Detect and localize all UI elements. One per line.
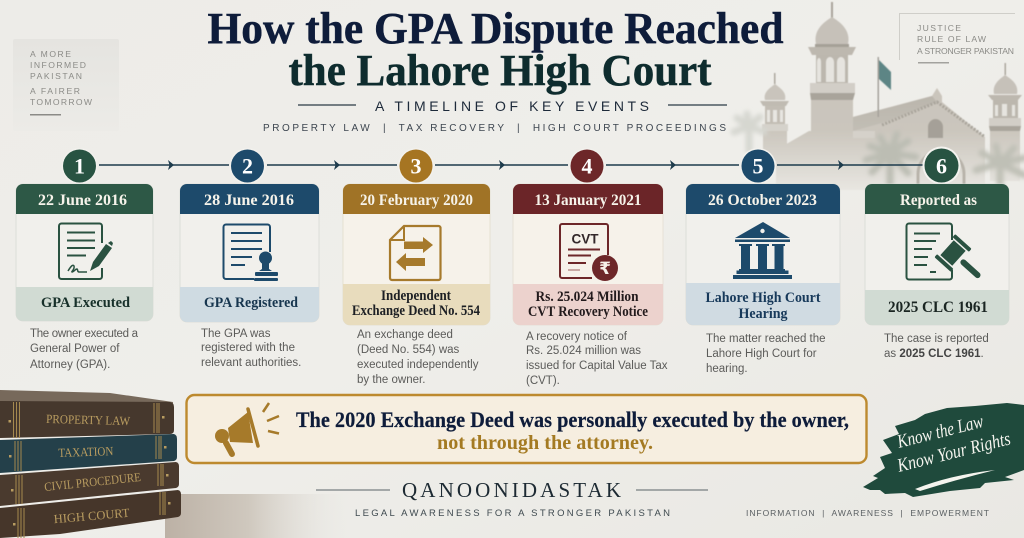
timeline connector arrows <box>99 160 923 170</box>
step 3 description: An exchange deed <box>357 329 453 341</box>
step 5 card: Lahore High Court <box>706 290 820 306</box>
illustration: stack of law books <box>0 390 181 538</box>
step 6 description: The case is reported <box>884 333 989 345</box>
step 6 number: 6 <box>936 154 947 178</box>
step 6 <box>865 146 1009 360</box>
brand footer: LEGAL AWARENESS FOR A STRONGER PAKISTAN <box>355 508 670 519</box>
step 1 description: General Power of <box>30 343 120 355</box>
icon: CVT notice <box>560 224 618 281</box>
step 1 number: 1 <box>74 154 85 178</box>
book: property law: PROPERTY LAW <box>46 412 130 428</box>
callout: key finding: not through the attorney. <box>437 432 653 454</box>
step 4 description <box>526 331 668 387</box>
step 2 description: registered with the <box>201 342 295 354</box>
step 4 number <box>569 148 605 184</box>
icon: CVT notice: ₹ <box>599 259 611 279</box>
callout: key finding: The 2020 Exchange Deed was personally executed by the owner, <box>296 407 849 432</box>
note: top right <box>900 14 1015 64</box>
step 5 card: 26 October 2023 <box>708 192 817 209</box>
step 3 description: (Deed No. 554) was <box>357 344 460 356</box>
step 2 <box>180 148 319 369</box>
step 2 card: GPA Registered <box>204 295 299 311</box>
note: top left: A FAIRER <box>30 86 80 96</box>
tagline: information awareness empowerment: INFORMATION | AWARENESS | EMPOWERMENT <box>746 508 989 518</box>
icon: courthouse <box>733 222 792 279</box>
step 5 description: hearing. <box>706 363 748 375</box>
step 2 description: The GPA was <box>201 328 271 340</box>
step 1 card <box>16 184 153 321</box>
step 1 description <box>30 328 139 371</box>
subtitle: A TIMELINE OF KEY EVENTS <box>375 98 649 114</box>
step 2 card: 28 June 2016 <box>204 192 294 209</box>
step 1 number <box>62 148 98 184</box>
palm trees <box>734 114 1024 185</box>
topic line: PROPERTY LAW | TAX RECOVERY | HIGH COURT PROCEEDINGS <box>263 123 726 134</box>
step 3 <box>343 148 490 386</box>
step 4 card <box>513 184 663 325</box>
step 5 card <box>686 184 840 325</box>
step 4 card: Rs. 25.024 Million <box>536 289 639 305</box>
step 5 description: Lahore High Court for <box>706 348 817 360</box>
step 1 description: Attorney (GPA). <box>30 359 110 371</box>
step 3 card: 20 February 2020 <box>360 192 473 209</box>
illustration: Lahore High Court building <box>734 2 1024 190</box>
step 3 card <box>343 184 490 325</box>
step 2 card <box>180 184 319 322</box>
step 5 number <box>740 148 776 184</box>
step 5 number: 5 <box>752 154 764 178</box>
step 1 card: 22 June 2016 <box>38 192 127 209</box>
brand footer: QANOONIDASTAK <box>402 478 621 502</box>
step 2 description <box>201 328 301 369</box>
central tower <box>831 2 833 18</box>
step 6 card: 2025 CLC 1961 <box>888 299 988 316</box>
note: top left: TOMORROW <box>30 97 93 107</box>
step 5 card: Hearing <box>738 306 788 322</box>
step 4 number: 4 <box>582 154 592 178</box>
step 3 number: 3 <box>410 154 422 178</box>
step 2 description: relevant authorities. <box>201 357 301 369</box>
step 3 card: Exchange Deed No. 554 <box>352 303 480 319</box>
flag <box>878 57 879 117</box>
note: top right: A STRONGER PAKISTAN <box>917 46 1014 56</box>
illustration: table surface <box>165 494 350 538</box>
step 1 description: The owner executed a <box>30 328 139 340</box>
step 6 description <box>884 333 989 360</box>
icon: stamped document <box>224 224 278 281</box>
book: high court <box>0 490 181 538</box>
step 4 description: issued for Capital Value Tax <box>526 360 668 372</box>
step 4 description: A recovery notice of <box>526 331 628 343</box>
note: top left: INFORMED <box>30 60 86 70</box>
note: top left: PAKISTAN <box>30 71 82 81</box>
note: top right: JUSTICE <box>917 23 961 33</box>
main hall <box>853 88 985 190</box>
step 3 description: by the owner. <box>357 374 425 386</box>
left tower <box>774 73 776 84</box>
step 4 description: Rs. 25.024 million was <box>526 345 641 357</box>
note: top left: A MORE <box>30 49 71 59</box>
book: civil procedure <box>0 462 179 506</box>
icon: document with gavel <box>906 224 990 289</box>
step 6 card <box>865 184 1009 325</box>
step 5 <box>686 148 840 375</box>
step 3 number <box>398 148 434 184</box>
book: civil procedure: CIVIL PROCEDURE <box>44 470 142 494</box>
step 4 <box>513 148 668 387</box>
title <box>208 4 784 95</box>
brush badge: know the law <box>863 403 1024 497</box>
icon: megaphone <box>215 403 279 454</box>
step 3 description: executed independently <box>357 359 479 371</box>
step 3 card: Independent <box>381 288 451 304</box>
brand footer <box>316 478 708 519</box>
step 5 description <box>706 333 826 375</box>
step 5 description: The matter reached the <box>706 333 826 345</box>
step 4 description: (CVT). <box>526 375 560 387</box>
book: property law <box>0 401 174 438</box>
icon: exchange document <box>390 226 440 280</box>
book: taxation <box>0 434 177 473</box>
left wing <box>776 131 815 190</box>
icon: signed document <box>59 224 113 279</box>
step 1 card: GPA Executed <box>41 295 131 311</box>
step 6 description: as 2025 CLC 1961. <box>884 348 984 360</box>
step 4 card: CVT Recovery Notice <box>528 304 648 320</box>
step 2 number <box>230 148 266 184</box>
step 2 number: 2 <box>242 154 253 178</box>
brush badge: know the law: Know the Law <box>894 411 986 453</box>
title: How the GPA Dispute Reached <box>208 4 784 53</box>
book: high court: HIGH COURT <box>53 506 130 526</box>
note: top left <box>13 39 119 131</box>
title: the Lahore High Court <box>288 46 712 95</box>
step 6 number <box>922 146 960 184</box>
step 3 description <box>357 329 479 386</box>
right tower <box>1004 63 1006 75</box>
book: taxation: TAXATION <box>58 444 114 460</box>
step 4 card: 13 January 2021 <box>534 192 642 209</box>
step 1 <box>16 148 153 371</box>
note: top right: RULE OF LAW <box>917 34 987 44</box>
callout: key finding <box>186 395 866 463</box>
step 6 card: Reported as <box>900 192 977 209</box>
icon: CVT notice: CVT <box>572 230 599 246</box>
